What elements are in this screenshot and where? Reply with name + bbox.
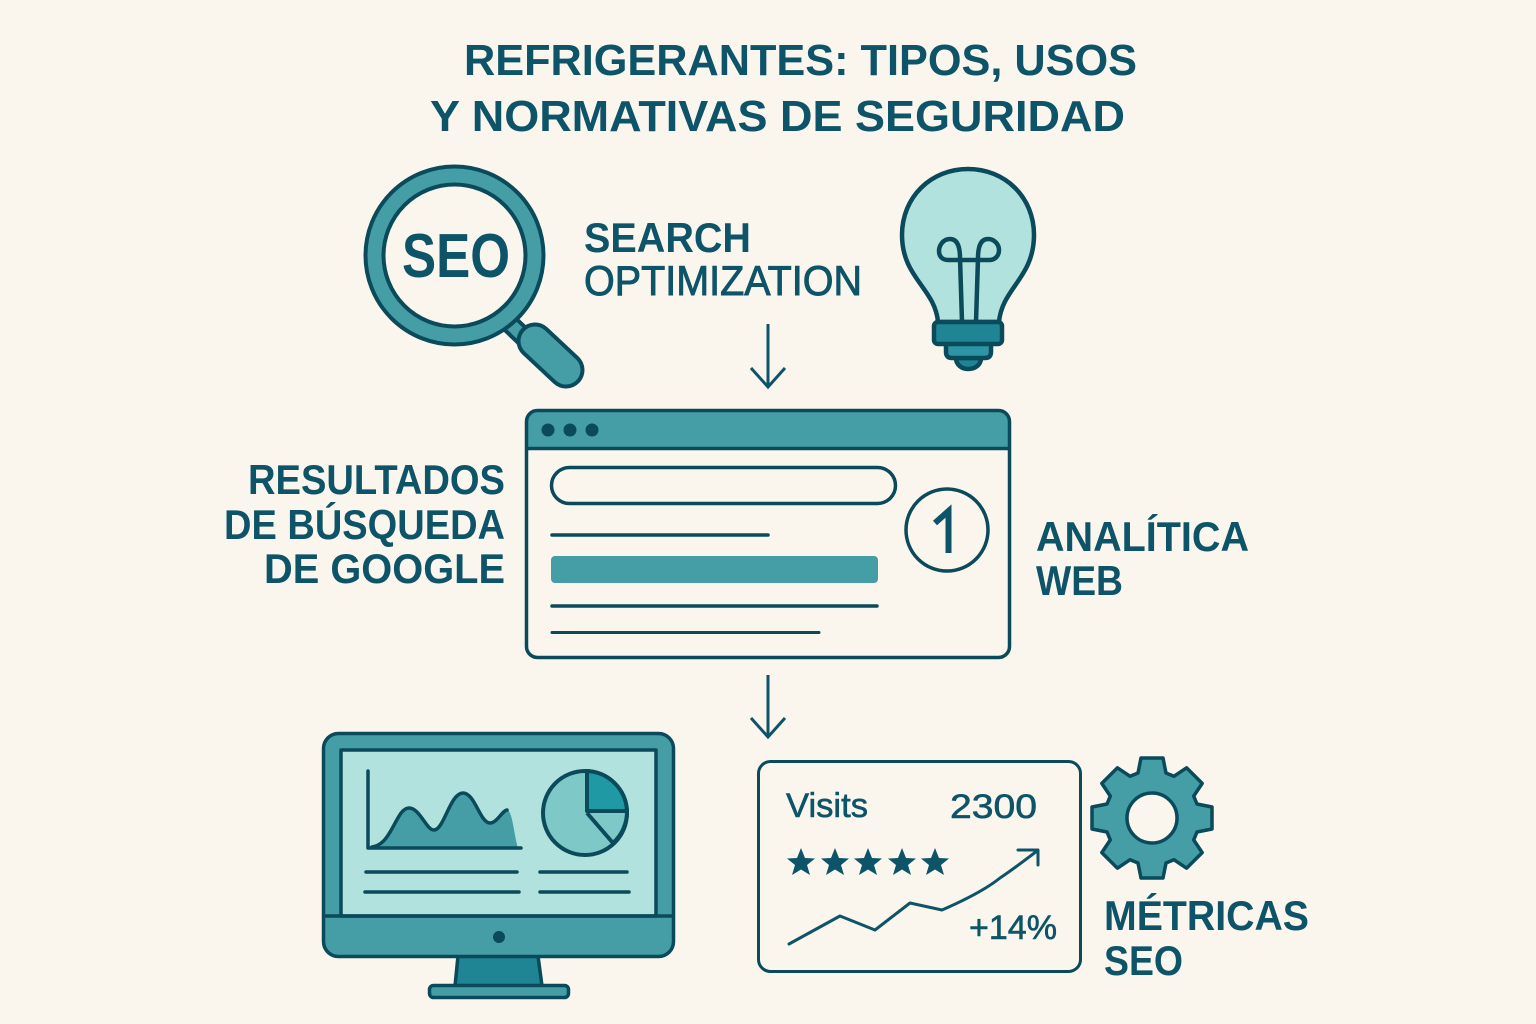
title: Y NORMATIVAS DE SEGURIDAD (430, 92, 1125, 141)
browser title bar (526, 410, 1010, 448)
label: metricas seo: SEO (1104, 937, 1183, 984)
arrow: results to analytics (751, 675, 785, 737)
label: resultados de busqueda: DE GOOGLE (264, 545, 505, 592)
rank badge (906, 489, 988, 571)
window dots (542, 424, 598, 436)
area chart (368, 771, 521, 848)
label: metricas seo: MÉTRICAS (1104, 892, 1309, 939)
search box (552, 468, 896, 504)
label: analitica web (1036, 513, 1249, 604)
visits label: Visits (786, 787, 868, 825)
pie chart (543, 771, 627, 855)
icon: SEO magnifying glass (374, 176, 566, 370)
monitor screen (341, 750, 656, 916)
label: search optimization: OPTIMIZATION (584, 257, 862, 304)
star rating (787, 848, 949, 875)
panel: metrics card (758, 762, 1080, 972)
arrow: search to results (751, 324, 785, 387)
label: resultados de busqueda: DE BÚSQUEDA (224, 500, 505, 548)
label: resultados de busqueda (224, 456, 505, 592)
monitor stand (430, 956, 568, 998)
panel: browser search results (526, 410, 1010, 658)
icon: gear (1092, 758, 1212, 878)
power dot (493, 931, 505, 943)
screen text lines (365, 872, 629, 892)
icon: analytics monitor (323, 734, 675, 998)
label: analitica web: WEB (1036, 557, 1123, 604)
label: analitica web: ANALÍTICA (1036, 513, 1249, 560)
label: metricas seo (1104, 892, 1309, 984)
rank badge: 1 (947, 552, 948, 554)
trend arrow (789, 850, 1038, 944)
label: search optimization: SEARCH (584, 214, 751, 261)
icon: SEO magnifying glass: SEO (402, 222, 510, 291)
label: search optimization (584, 214, 862, 304)
highlighted result (551, 556, 878, 583)
visits value: 2300 (950, 788, 1037, 826)
monitor body (324, 734, 674, 956)
title (430, 36, 1137, 141)
result lines (552, 535, 877, 632)
label: resultados de busqueda: RESULTADOS (248, 456, 505, 503)
growth percentage: +14% (969, 909, 1057, 947)
icon: light bulb (902, 169, 1034, 369)
title: REFRIGERANTES: TIPOS, USOS (464, 36, 1137, 85)
